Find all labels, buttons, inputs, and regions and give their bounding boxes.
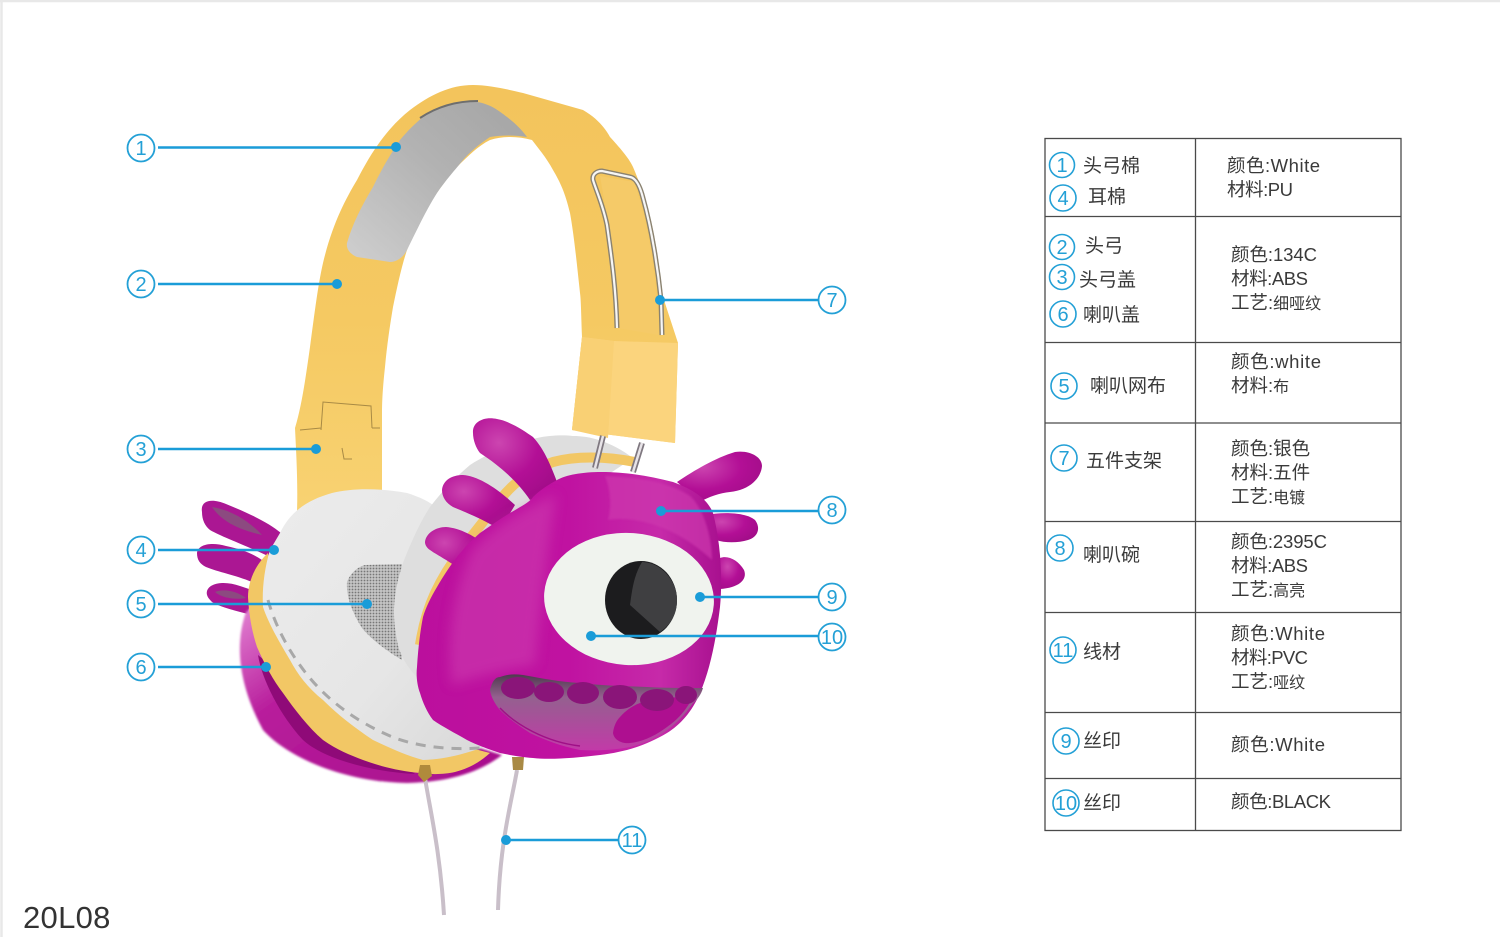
callout 5 [128, 590, 372, 618]
front cushion [394, 435, 633, 677]
rear cushion [263, 489, 490, 760]
callout 2: 2 [135, 274, 147, 296]
row 8: black silk print: 10 [1055, 793, 1077, 815]
row 2: headband and covers: 颜色:134C [1231, 244, 1317, 265]
row 1: pad and ear cushion: 1 [1056, 155, 1068, 177]
row 2: headband and covers: 3 [1056, 267, 1068, 289]
rear ear cup tentacles [197, 501, 281, 614]
row 6: cable: 材料:PVC [1231, 647, 1308, 668]
callout 6 [128, 654, 271, 680]
row 3: speaker mesh [1051, 351, 1321, 399]
row 7: white silk print: 颜色:White [1231, 734, 1325, 755]
callout 4 [128, 536, 279, 564]
row 1: pad and ear cushion [1050, 152, 1320, 211]
metal hinges [595, 436, 642, 472]
pad dark upper seam [420, 101, 478, 118]
row 4: metal bracket: 工艺:电镀 [1231, 486, 1305, 507]
row 7: white silk print: 9 [1060, 731, 1072, 753]
row 1: pad and ear cushion: 头弓棉 [1083, 155, 1140, 177]
slider block [572, 337, 678, 443]
row 5: speaker cup: 颜色:2395C [1231, 531, 1327, 552]
eye white [540, 527, 718, 671]
row 7: white silk print: 丝印 [1083, 730, 1121, 752]
right cable [498, 757, 524, 910]
row 4: metal bracket [1051, 438, 1310, 507]
row 4: metal bracket: 材料:五件 [1231, 462, 1310, 483]
row 2: headband and covers [1050, 234, 1321, 327]
callout 2 [128, 270, 342, 298]
row 3: speaker mesh: 材料:布 [1231, 375, 1289, 396]
callout 10 [586, 624, 846, 650]
headband seam lines [300, 402, 380, 459]
row 8: black silk print: 丝印 [1083, 792, 1121, 814]
rear ear cup yellow ring [248, 553, 490, 774]
callout 3 [128, 436, 321, 462]
front yellow ring [420, 458, 635, 645]
callout 4: 4 [135, 540, 147, 562]
left cable [418, 765, 444, 915]
row 2: headband and covers: 头弓盖 [1079, 269, 1136, 291]
row 3: speaker mesh: 颜色:white [1231, 351, 1321, 372]
headband [295, 85, 678, 512]
callout 5: 5 [135, 594, 147, 616]
eye pupil [605, 561, 677, 639]
callout 9 [695, 584, 846, 610]
row 5: speaker cup: 8 [1054, 538, 1066, 560]
callout 11: 11 [622, 830, 642, 852]
cup tentacles [473, 418, 560, 500]
parts specification table [1045, 138, 1401, 831]
cup left reflection [450, 495, 556, 685]
row 1: pad and ear cushion: 4 [1057, 188, 1069, 210]
row 6: cable: 11 [1053, 640, 1073, 662]
row 1: pad and ear cushion: 耳棉 [1088, 186, 1126, 208]
speaker mesh [347, 564, 402, 660]
row 2: headband and covers: 2 [1056, 237, 1068, 259]
row 4: metal bracket: 五件支架 [1086, 450, 1162, 472]
row 4: metal bracket: 颜色:银色 [1231, 438, 1310, 459]
callout 10: 10 [821, 627, 843, 649]
row 6: cable [1050, 623, 1325, 692]
model number: 20L08 [23, 900, 111, 935]
row 8: black silk print [1053, 790, 1332, 816]
front ear cup [417, 418, 762, 759]
headband foam pad [347, 102, 527, 262]
callout 7 [655, 286, 846, 314]
callout 3: 3 [135, 439, 147, 461]
rear shell inner shadow [258, 655, 415, 774]
mouth crease [500, 708, 580, 746]
row 3: speaker mesh: 5 [1058, 376, 1070, 398]
row 4: metal bracket: 7 [1058, 448, 1070, 470]
row 6: cable: 工艺:哑纹 [1231, 671, 1305, 692]
row 5: speaker cup: 工艺:高亮 [1231, 579, 1305, 600]
row 3: speaker mesh: 喇叭网布 [1090, 375, 1166, 397]
row 6: cable: 线材 [1083, 641, 1121, 663]
row 5: speaker cup [1047, 531, 1327, 600]
callout 6: 6 [135, 657, 147, 679]
headphone illustration [197, 85, 762, 915]
mouth teeth [501, 677, 697, 711]
row 2: headband and covers: 工艺:细哑纹 [1231, 292, 1321, 313]
mouth [490, 674, 703, 750]
callout 7: 7 [826, 290, 838, 312]
row 2: headband and covers: 材料:ABS [1231, 268, 1308, 289]
slot panel [600, 176, 659, 335]
row 2: headband and covers: 喇叭盖 [1083, 304, 1140, 326]
row 7: white silk print [1053, 728, 1325, 755]
mouth tongue [613, 697, 693, 743]
callout 9: 9 [826, 587, 838, 609]
row 8: black silk print: 颜色:BLACK [1231, 791, 1332, 812]
row 1: pad and ear cushion: 材料:PU [1227, 179, 1293, 200]
rear ear cup shell [240, 600, 502, 783]
row 5: speaker cup: 材料:ABS [1231, 555, 1308, 576]
cup shell [417, 472, 721, 759]
callout 1 [128, 134, 401, 162]
cushion stitched edge [268, 600, 480, 749]
callout 11 [501, 826, 646, 854]
silver slider wire [593, 171, 662, 335]
callout 8: 8 [826, 500, 838, 522]
row 1: pad and ear cushion: 颜色:White [1227, 155, 1320, 176]
row 2: headband and covers: 6 [1057, 304, 1069, 326]
cup right reflection [605, 476, 712, 560]
row 2: headband and covers: 头弓 [1085, 235, 1123, 257]
callout 8 [656, 496, 846, 524]
row 6: cable: 颜色:White [1231, 623, 1325, 644]
callout 1: 1 [135, 138, 147, 160]
row 5: speaker cup: 喇叭碗 [1083, 544, 1140, 566]
